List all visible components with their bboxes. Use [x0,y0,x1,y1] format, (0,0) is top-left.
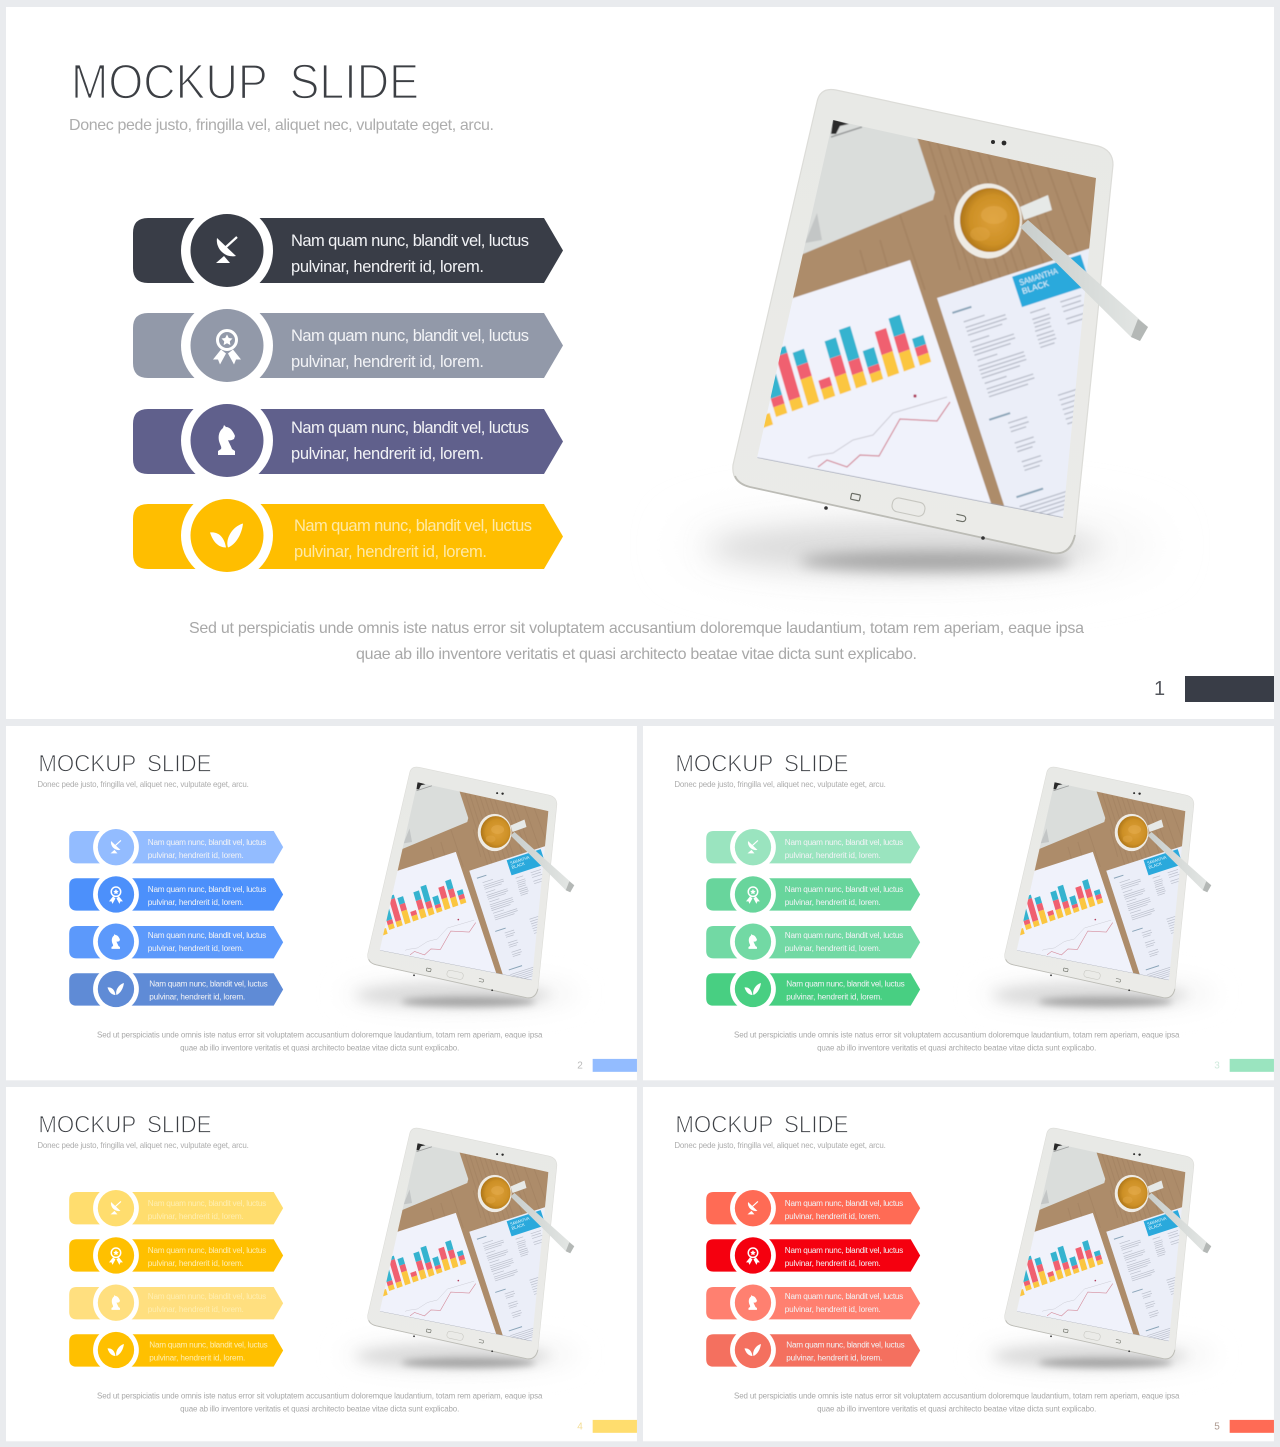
row 4 [133,490,563,582]
row 3: Nam quam nunc, blandit vel, luctus [785,1292,903,1301]
row 2: pulvinar, hendrerit id, lorem. [785,1259,881,1268]
row 3 [706,1280,920,1326]
row 3 [69,1280,283,1326]
row 1 [706,1185,920,1231]
row 4: pulvinar, hendrerit id, lorem. [786,1354,882,1363]
body text [734,1392,1180,1413]
row 3: Nam quam nunc, blandit vel, luctus [291,419,529,437]
row 2 [69,1233,283,1278]
body text [734,1031,1180,1052]
line chart in photo [808,397,947,458]
row 2 [133,300,563,392]
subtitle: Donec pede justo, fringilla vel, aliquet nec, vulputate eget, arcu. [69,117,494,134]
bar chart in photo [742,300,933,428]
chart paper [740,260,1000,530]
page number: 3 [1214,1060,1220,1071]
row 2: pulvinar, hendrerit id, lorem. [291,353,484,371]
title: MOCKUP SLIDE [675,751,849,778]
row 2 [706,1233,920,1278]
row 4 [69,966,283,1012]
body text: quae ab illo inventore veritatis et quasi architecto beatae vitae dicta sunt explicabo. [817,1043,1096,1052]
row 2 [69,872,283,917]
row 1: Nam quam nunc, blandit vel, luctus [785,838,903,847]
body text: Sed ut perspiciatis unde omnis iste natus error sit voluptatem accusantium doloremque laudantium, totam rem aperiam, eaque ipsa [734,1392,1180,1401]
row 2: Nam quam nunc, blandit vel, luctus [291,327,529,345]
subtitle: Donec pede justo, fringilla vel, aliquet nec, vulputate eget, arcu. [37,780,249,789]
row 4 [69,1327,283,1373]
footer tab [593,1059,637,1072]
row 3 [69,919,283,965]
row 2: pulvinar, hendrerit id, lorem. [785,898,881,907]
resume paper [937,245,1100,530]
body text: Sed ut perspiciatis unde omnis iste natus error sit voluptatem accusantium doloremque laudantium, totam rem aperiam, eaque ipsa [189,620,1084,637]
body text: Sed ut perspiciatis unde omnis iste natus error sit voluptatem accusantium doloremque laudantium, totam rem aperiam, eaque ipsa [734,1031,1180,1040]
body text [97,1031,543,1052]
row 3: pulvinar, hendrerit id, lorem. [148,944,244,953]
page number: 1 [1154,678,1165,700]
tablet mockup [680,90,1164,581]
tablet mockup [341,767,582,1012]
footer tab [1230,1420,1274,1433]
row 1: pulvinar, hendrerit id, lorem. [148,1212,244,1221]
row 1 [706,824,920,870]
row 4: pulvinar, hendrerit id, lorem. [786,993,882,1002]
body text: quae ab illo inventore veritatis et quasi architecto beatae vitae dicta sunt explicabo. [180,1043,459,1052]
row 4 [706,1327,920,1373]
tablet mockup [341,1128,582,1373]
row 3: Nam quam nunc, blandit vel, luctus [148,931,266,940]
tablet mockup [978,1128,1219,1373]
page number: 5 [1214,1421,1220,1432]
subtitle: Donec pede justo, fringilla vel, aliquet nec, vulputate eget, arcu. [674,780,886,789]
slide 2: blue theme [6,726,637,1080]
row 2: Nam quam nunc, blandit vel, luctus [148,885,266,894]
row 2 [706,872,920,917]
body text [189,620,1084,663]
subtitle: Donec pede justo, fringilla vel, aliquet nec, vulputate eget, arcu. [37,1141,249,1150]
slide 5: red theme [643,1087,1274,1441]
row 1: Nam quam nunc, blandit vel, luctus [148,1199,266,1208]
row 4: Nam quam nunc, blandit vel, luctus [786,1341,905,1350]
body text: Sed ut perspiciatis unde omnis iste natus error sit voluptatem accusantium doloremque laudantium, totam rem aperiam, eaque ipsa [97,1392,543,1401]
row 1: pulvinar, hendrerit id, lorem. [291,258,484,276]
body text: quae ab illo inventore veritatis et quasi architecto beatae vitae dicta sunt explicabo. [817,1404,1096,1413]
coffee cup [1020,195,1052,220]
slide panel [6,726,637,1080]
body text: quae ab illo inventore veritatis et quasi architecto beatae vitae dicta sunt explicabo. [180,1404,459,1413]
slide panel [643,1087,1274,1441]
slide panel [6,1087,637,1441]
title: MOCKUP SLIDE [71,56,419,110]
page number: 2 [577,1060,583,1071]
row 4: Nam quam nunc, blandit vel, luctus [294,517,532,535]
row 4: Nam quam nunc, blandit vel, luctus [149,1341,268,1350]
row 1: Nam quam nunc, blandit vel, luctus [291,232,529,250]
slide 1: large dark theme [6,7,1274,719]
row 1: pulvinar, hendrerit id, lorem. [785,851,881,860]
row 4: pulvinar, hendrerit id, lorem. [149,993,245,1002]
tablet mockup: BLACK [1021,278,1050,296]
tablet mockup [978,767,1219,1012]
footer tab [1230,1059,1274,1072]
row 1 [133,204,563,296]
row 3: pulvinar, hendrerit id, lorem. [148,1305,244,1314]
row 3 [706,919,920,965]
row 4: pulvinar, hendrerit id, lorem. [149,1354,245,1363]
title: MOCKUP SLIDE [38,1112,212,1139]
slide panel [643,726,1274,1080]
row 1 [69,824,283,870]
row 2: pulvinar, hendrerit id, lorem. [148,898,244,907]
row 2: Nam quam nunc, blandit vel, luctus [785,885,903,894]
row 3: pulvinar, hendrerit id, lorem. [291,445,484,463]
row 4 [706,966,920,1012]
tablet mockup: SAMANTHA [1018,266,1059,288]
footer tab [1185,676,1274,702]
row 3: Nam quam nunc, blandit vel, luctus [785,931,903,940]
title: MOCKUP SLIDE [38,751,212,778]
page number: 4 [577,1421,583,1432]
title: MOCKUP SLIDE [675,1112,849,1139]
row 1: pulvinar, hendrerit id, lorem. [148,851,244,860]
row 4: Nam quam nunc, blandit vel, luctus [786,980,905,989]
subtitle: Donec pede justo, fringilla vel, aliquet nec, vulputate eget, arcu. [674,1141,886,1150]
row 2: Nam quam nunc, blandit vel, luctus [148,1246,266,1255]
row 3: Nam quam nunc, blandit vel, luctus [148,1292,266,1301]
row 1: Nam quam nunc, blandit vel, luctus [148,838,266,847]
row 4: Nam quam nunc, blandit vel, luctus [149,980,268,989]
row 3 [133,394,563,486]
slide 3: green theme [643,726,1274,1080]
body text: quae ab illo inventore veritatis et quasi architecto beatae vitae dicta sunt explicabo. [356,646,917,663]
stylus [1020,220,1148,341]
slide 4: yellow theme [6,1087,637,1441]
row 3: pulvinar, hendrerit id, lorem. [785,1305,881,1314]
row 1: Nam quam nunc, blandit vel, luctus [785,1199,903,1208]
slide panel [6,7,1274,719]
body text [97,1392,543,1413]
row 3: pulvinar, hendrerit id, lorem. [785,944,881,953]
body text: Sed ut perspiciatis unde omnis iste natus error sit voluptatem accusantium doloremque laudantium, totam rem aperiam, eaque ipsa [97,1031,543,1040]
row 1: pulvinar, hendrerit id, lorem. [785,1212,881,1221]
row 4: pulvinar, hendrerit id, lorem. [294,543,487,561]
footer tab [593,1420,637,1433]
row 2: pulvinar, hendrerit id, lorem. [148,1259,244,1268]
row 2: Nam quam nunc, blandit vel, luctus [785,1246,903,1255]
row 1 [69,1185,283,1231]
